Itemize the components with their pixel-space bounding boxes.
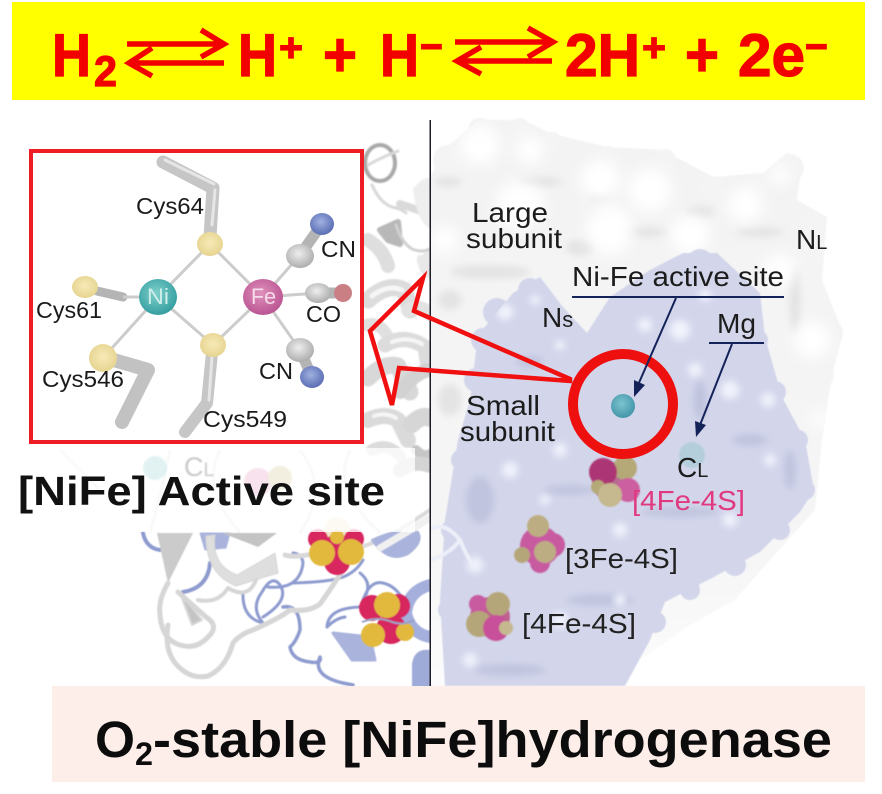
inset labels: Cys549: [203, 406, 287, 432]
inset labels: CO: [306, 301, 341, 327]
equation text: −: [420, 25, 443, 69]
inset labels: Cys546: [42, 366, 124, 392]
Ni atom: [139, 279, 177, 315]
subunit labels: Small: [466, 390, 540, 421]
inset labels: CN: [259, 358, 293, 384]
ligand sticks: [300, 224, 343, 377]
Fe atom: [243, 279, 283, 315]
title text: O: [95, 711, 135, 768]
red hollow arrow to inset: [370, 278, 570, 405]
cluster labels: [522, 485, 745, 639]
ghost atoms behind label: [143, 452, 292, 496]
red circle around active site: [573, 354, 673, 454]
subunit labels: subunit: [466, 223, 562, 254]
vertical divider line: [430, 120, 431, 686]
equation text: +: [279, 26, 303, 70]
inset labels: Cys64: [136, 193, 204, 219]
subunit labels: Large: [472, 197, 548, 228]
equation text: 2H: [565, 22, 640, 89]
protein surface: large subunit: [430, 118, 843, 686]
cluster 4Fe-4S lower: [466, 592, 513, 641]
cluster labels: [4Fe-4S]: [522, 608, 636, 639]
active site heading: [NiFe] Active site: [18, 468, 385, 514]
iron-sulfur clusters: surface view: [466, 456, 640, 641]
inset labels: [36, 193, 356, 432]
cluster 4Fe-4S upper: [589, 456, 640, 507]
active site sphere: [611, 394, 635, 418]
Ni atom: Ni: [147, 284, 169, 309]
title banner: [52, 686, 865, 782]
ribbon loop over surface: [430, 527, 474, 564]
cluster left lower: [359, 592, 414, 647]
cysteine sticks: [97, 160, 215, 432]
cluster labels: [4Fe-4S]: [632, 485, 745, 516]
cluster 3Fe-4S: [514, 515, 565, 573]
callout: Ni-Fe active site: Ni-Fe active site: [572, 261, 784, 292]
CL sphere: [679, 442, 705, 468]
cluster labels: [3Fe-4S]: [565, 543, 678, 574]
Fe atom: Fe: [251, 284, 276, 309]
equation text: 2: [94, 48, 117, 96]
subunit labels: NL: [796, 224, 827, 255]
callout: Mg: Mg: [717, 308, 756, 339]
inset labels: CN: [321, 236, 356, 262]
metal bonds: [103, 244, 318, 358]
equation text: −: [805, 25, 828, 69]
cluster left upper: [308, 517, 364, 575]
equation text: +: [642, 26, 666, 70]
carbon, nitrogen and oxygen atoms: [286, 213, 352, 388]
equation banner: [12, 2, 865, 100]
equation text: H: [52, 22, 91, 89]
translucent label: [NiFe] Active site: [0, 448, 415, 532]
equation text: [52, 21, 828, 96]
subunit labels: subunit: [460, 416, 555, 447]
equation text: +: [685, 21, 719, 90]
subunit labels: CL: [677, 452, 708, 483]
ribbon structure: lower left coils: [143, 510, 430, 686]
sulfur atoms: [72, 232, 226, 372]
iron-sulfur clusters: left ribbon view: [308, 517, 414, 647]
protein surface: small subunit: [430, 249, 815, 686]
equilibrium arrows 1: [127, 30, 224, 76]
subunit labels: [460, 197, 827, 483]
inset: active site structure: [31, 151, 362, 442]
ghost atoms behind label: CL: [184, 452, 214, 482]
title text: -stable [NiFe]hydrogenase: [153, 711, 832, 768]
equation text: H: [380, 22, 419, 89]
ghost ribbons behind label: [60, 450, 380, 532]
callout: Ni-Fe active site: [572, 261, 784, 397]
equation text: H: [238, 22, 277, 89]
equilibrium arrows 2: [455, 28, 553, 74]
ribbon structure: grey helices: [365, 145, 430, 470]
equation text: 2e: [738, 22, 805, 89]
subunit labels: Ns: [542, 302, 573, 333]
equation text: +: [323, 21, 357, 90]
inset labels: Cys61: [36, 297, 102, 323]
callout: Mg: [695, 308, 764, 437]
title text: 2: [135, 736, 153, 772]
